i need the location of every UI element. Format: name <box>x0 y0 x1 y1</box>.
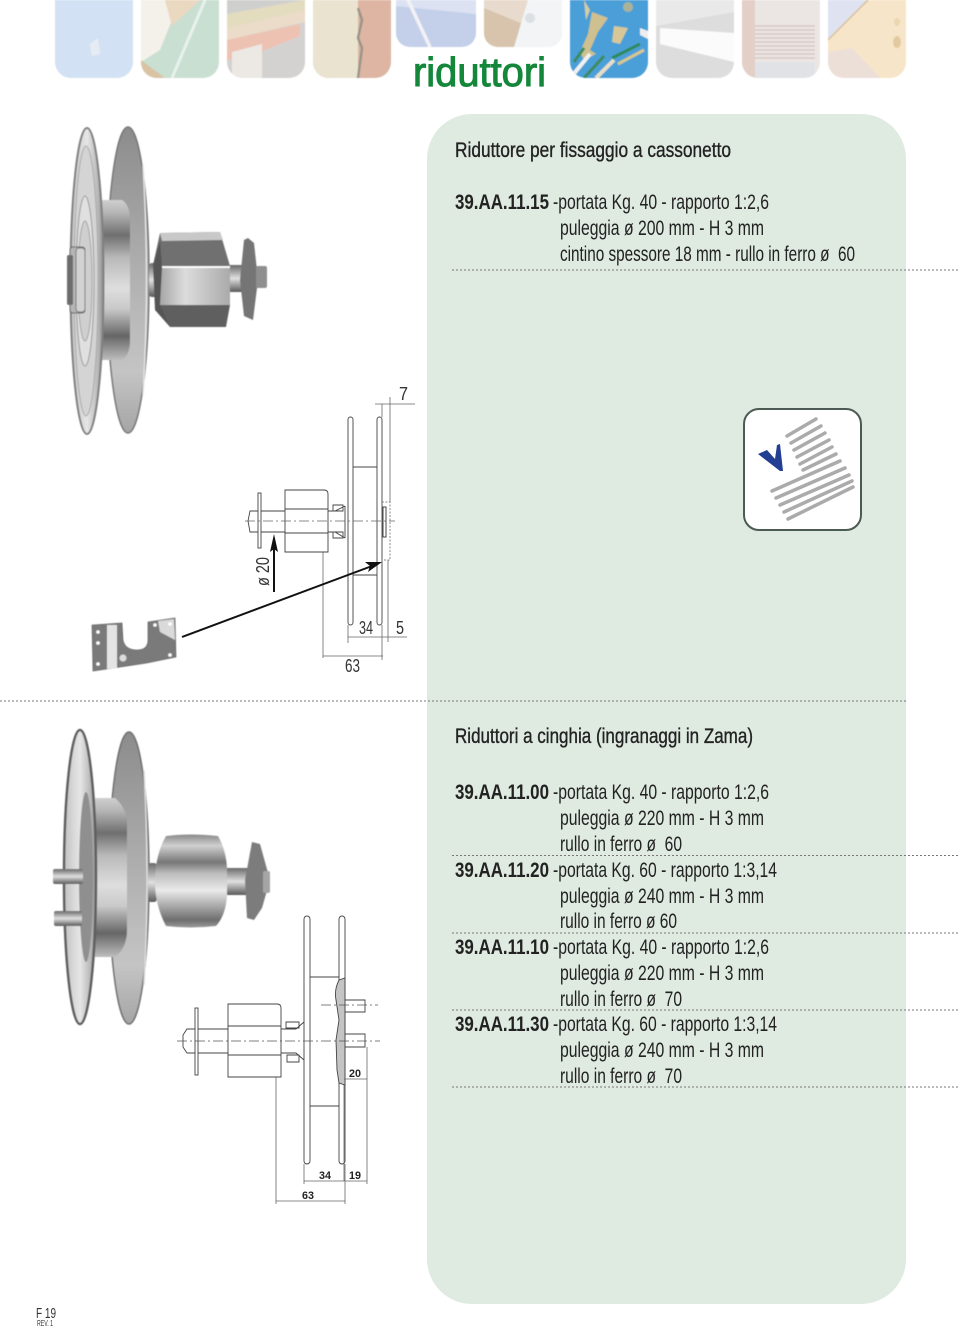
rear disk <box>107 127 149 433</box>
rear disk <box>109 732 149 1024</box>
product 39.AA.11.30 <box>455 1013 777 1088</box>
technical drawing 2: 34 <box>319 1170 332 1182</box>
bracket <box>92 618 176 671</box>
technical drawing 1: 5 <box>396 618 404 638</box>
thumbnail: blue hardware <box>570 0 648 78</box>
bolt <box>286 1022 299 1062</box>
product 39.AA.11.00: -portata Kg. 40 - rapporto 1:2,6 <box>553 781 769 804</box>
neck <box>149 263 158 297</box>
thumbnail: mint panels <box>141 0 219 78</box>
thumbnail: cream slat <box>313 0 391 78</box>
thumbnail: white band on grey <box>656 0 734 78</box>
arrow: up to shaft <box>270 534 278 592</box>
product 39.AA.11.10: -portata Kg. 40 - rapporto 1:2,6 <box>553 936 769 959</box>
product 39.AA.11.00: 39.AA.11.00 <box>455 781 549 804</box>
product 39.AA.11.00 <box>455 781 769 856</box>
footer page number: REV. 1 <box>37 1319 53 1328</box>
footer page number <box>36 1305 56 1328</box>
footer page number: F 19 <box>36 1305 56 1322</box>
section 1 text: cintino spessore 18 mm - rullo in ferro ø 60 <box>560 243 855 266</box>
hatched section <box>335 978 345 1085</box>
product 39.AA.11.20: 39.AA.11.20 <box>455 859 549 882</box>
roller <box>228 1004 281 1077</box>
specs: -portata Kg. 40 - rapporto 1:2,6 <box>553 191 769 214</box>
dashed parts <box>382 502 390 560</box>
hub <box>92 798 127 957</box>
front disk <box>64 730 96 1024</box>
shaft, washer and nut <box>261 511 285 532</box>
thumbnail: mesh <box>742 0 820 78</box>
technical drawing 2: 63 <box>302 1190 314 1202</box>
nut <box>256 266 267 288</box>
neck <box>148 863 157 902</box>
centre lines <box>177 1005 380 1041</box>
technical drawing 1 <box>245 384 415 676</box>
heading: Riduttore per fissaggio a cassonetto <box>455 139 731 162</box>
product 39.AA.11.30: puleggia ø 240 mm - H 3 mm <box>560 1039 764 1062</box>
short bars <box>787 419 836 470</box>
dimensions <box>276 1047 367 1204</box>
shaft <box>227 868 253 895</box>
dimensions <box>323 397 415 660</box>
long bars <box>772 461 853 519</box>
product 39.AA.11.00: rullo in ferro ø 60 <box>560 833 682 856</box>
washer <box>245 842 270 920</box>
technical drawing 1: 34 <box>359 618 373 638</box>
centre boss <box>70 247 85 313</box>
technical drawing 1: 63 <box>345 656 360 676</box>
thumbnail: coloured slats <box>227 0 305 78</box>
pins <box>53 869 83 884</box>
hub <box>100 200 130 360</box>
section 1 text <box>455 139 855 266</box>
technical drawing 1: ø 20 <box>253 557 273 586</box>
header image strip <box>55 0 906 78</box>
product 39.AA.11.30: rullo in ferro ø 70 <box>560 1065 682 1088</box>
product photo: pulley 2 <box>53 730 270 1024</box>
disks <box>304 916 310 1164</box>
code: 39.AA.11.15 <box>455 191 549 214</box>
hex roller <box>153 232 230 266</box>
thumbnail: wood <box>828 0 906 78</box>
roller <box>285 490 328 552</box>
centre line <box>245 520 395 522</box>
title: riduttori <box>413 49 546 95</box>
arrow: bracket to pulley <box>182 562 382 637</box>
washer <box>240 238 258 320</box>
thumbnail: beige with white <box>484 0 562 47</box>
thumbnail: blue plaster <box>55 0 133 78</box>
dimension labels: 20 <box>349 1068 361 1080</box>
icon: slats with V logo <box>744 409 861 530</box>
blue V <box>758 444 783 471</box>
product 39.AA.11.30: 39.AA.11.30 <box>455 1013 549 1036</box>
product 39.AA.11.10: puleggia ø 220 mm - H 3 mm <box>560 962 764 985</box>
shaft <box>230 265 253 292</box>
product 39.AA.11.30: -portata Kg. 60 - rapporto 1:3,14 <box>553 1013 777 1036</box>
product 39.AA.11.10 <box>455 936 769 1011</box>
panel: green background <box>427 114 906 1304</box>
product 39.AA.11.20: rullo in ferro ø 60 <box>560 910 677 933</box>
section 2 heading: Riduttori a cinghia (ingranaggi in Zama) <box>455 725 753 748</box>
product 39.AA.11.20 <box>455 859 777 933</box>
thumbnail: lavender profile <box>396 0 476 47</box>
section 1 text: puleggia ø 200 mm - H 3 mm <box>560 217 764 240</box>
bell roller <box>155 834 227 928</box>
technical drawing 2: 19 <box>349 1170 361 1182</box>
product 39.AA.11.20: puleggia ø 240 mm - H 3 mm <box>560 885 764 908</box>
dimension labels: 7 <box>399 384 408 404</box>
product 39.AA.11.10: rullo in ferro ø 70 <box>560 988 682 1011</box>
shaft, washer, nut <box>198 1022 304 1060</box>
front disk <box>70 128 104 434</box>
product 39.AA.11.00: puleggia ø 220 mm - H 3 mm <box>560 807 764 830</box>
technical drawing 2 <box>177 916 380 1204</box>
bolt and neck <box>328 505 345 538</box>
product 39.AA.11.20: -portata Kg. 60 - rapporto 1:3,14 <box>553 859 777 882</box>
pins <box>345 1000 365 1047</box>
disks <box>348 417 353 625</box>
product photo: pulley 1 <box>67 127 267 434</box>
product 39.AA.11.10: 39.AA.11.10 <box>455 936 549 959</box>
